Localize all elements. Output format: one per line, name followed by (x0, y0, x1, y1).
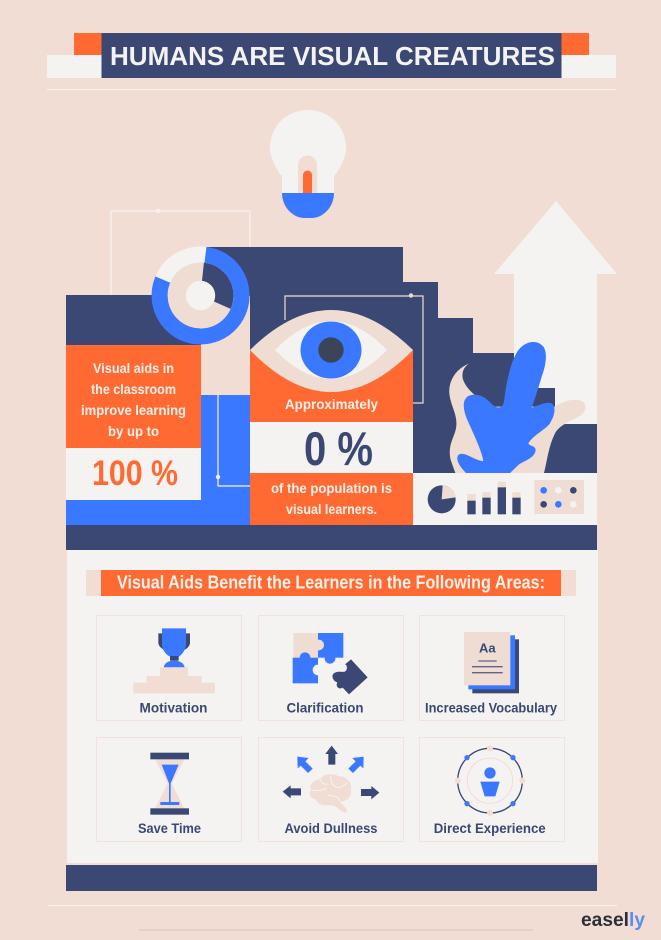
navy band above benefits panel (66, 525, 597, 550)
centre stat text: of the population is (271, 480, 392, 496)
icon: eye (250, 310, 413, 392)
card: avoid dullness (258, 738, 404, 842)
panel: left stat block (66, 295, 250, 525)
card: increased vocabulary (420, 616, 564, 720)
icon: hourglass (150, 753, 189, 815)
left stat text: by up to (108, 423, 159, 439)
thin frame behind donut (111, 209, 250, 296)
card: motivation (96, 616, 242, 720)
left stat text: the classroom (91, 381, 176, 397)
title banner (47, 33, 616, 78)
icon: pie chart (428, 485, 456, 513)
left stat number: 100 % (92, 454, 178, 493)
centre stat number: 0 % (304, 422, 373, 475)
icon: puzzle (293, 633, 368, 694)
card: save time (96, 738, 242, 842)
left stat text (81, 360, 186, 439)
panel: mini charts strip (413, 473, 597, 525)
icon: donut chart (160, 254, 242, 336)
panel: centre stat block (250, 310, 413, 525)
label: direct experience: Direct Experience (434, 821, 546, 836)
icon: upward arrow (494, 201, 617, 430)
icon: light bulb (270, 110, 346, 218)
icon: trophy (133, 628, 215, 693)
label: motivation: Motivation (140, 700, 208, 716)
icon: plant (449, 342, 585, 473)
card: direct experience (420, 738, 564, 842)
left stat text: improve learning (81, 402, 186, 418)
card: clarification (258, 616, 404, 720)
heading: benefits: Visual Aids Benefit the Learners in the Following Areas: (117, 572, 545, 592)
title: HUMANS ARE VISUAL CREATURES (110, 41, 555, 71)
label: avoid dullness: Avoid Dullness (284, 821, 378, 836)
label: increased vocabulary: Increased Vocabulary (425, 700, 557, 716)
panel: benefits (67, 550, 598, 863)
navy band below benefits panel (66, 865, 597, 891)
centre stat lead text: Approximately (285, 396, 378, 412)
icon: person in orbit (455, 745, 525, 816)
left stat text: Visual aids in (93, 360, 174, 376)
logo: easelly: easelly (581, 910, 645, 931)
icon: brain with arrows (283, 746, 379, 813)
label: save time: Save Time (138, 821, 201, 836)
label: clarification: Clarification (286, 700, 364, 716)
stepped navy building (200, 247, 597, 473)
centre stat text (271, 480, 392, 517)
thin frame behind eye (285, 293, 423, 403)
centre stat text: visual learners. (286, 501, 377, 517)
icon: book (464, 632, 519, 693)
icon: bar chart (467, 482, 521, 514)
icon: book: Aa (479, 641, 496, 656)
icon: dot grid (534, 480, 584, 514)
